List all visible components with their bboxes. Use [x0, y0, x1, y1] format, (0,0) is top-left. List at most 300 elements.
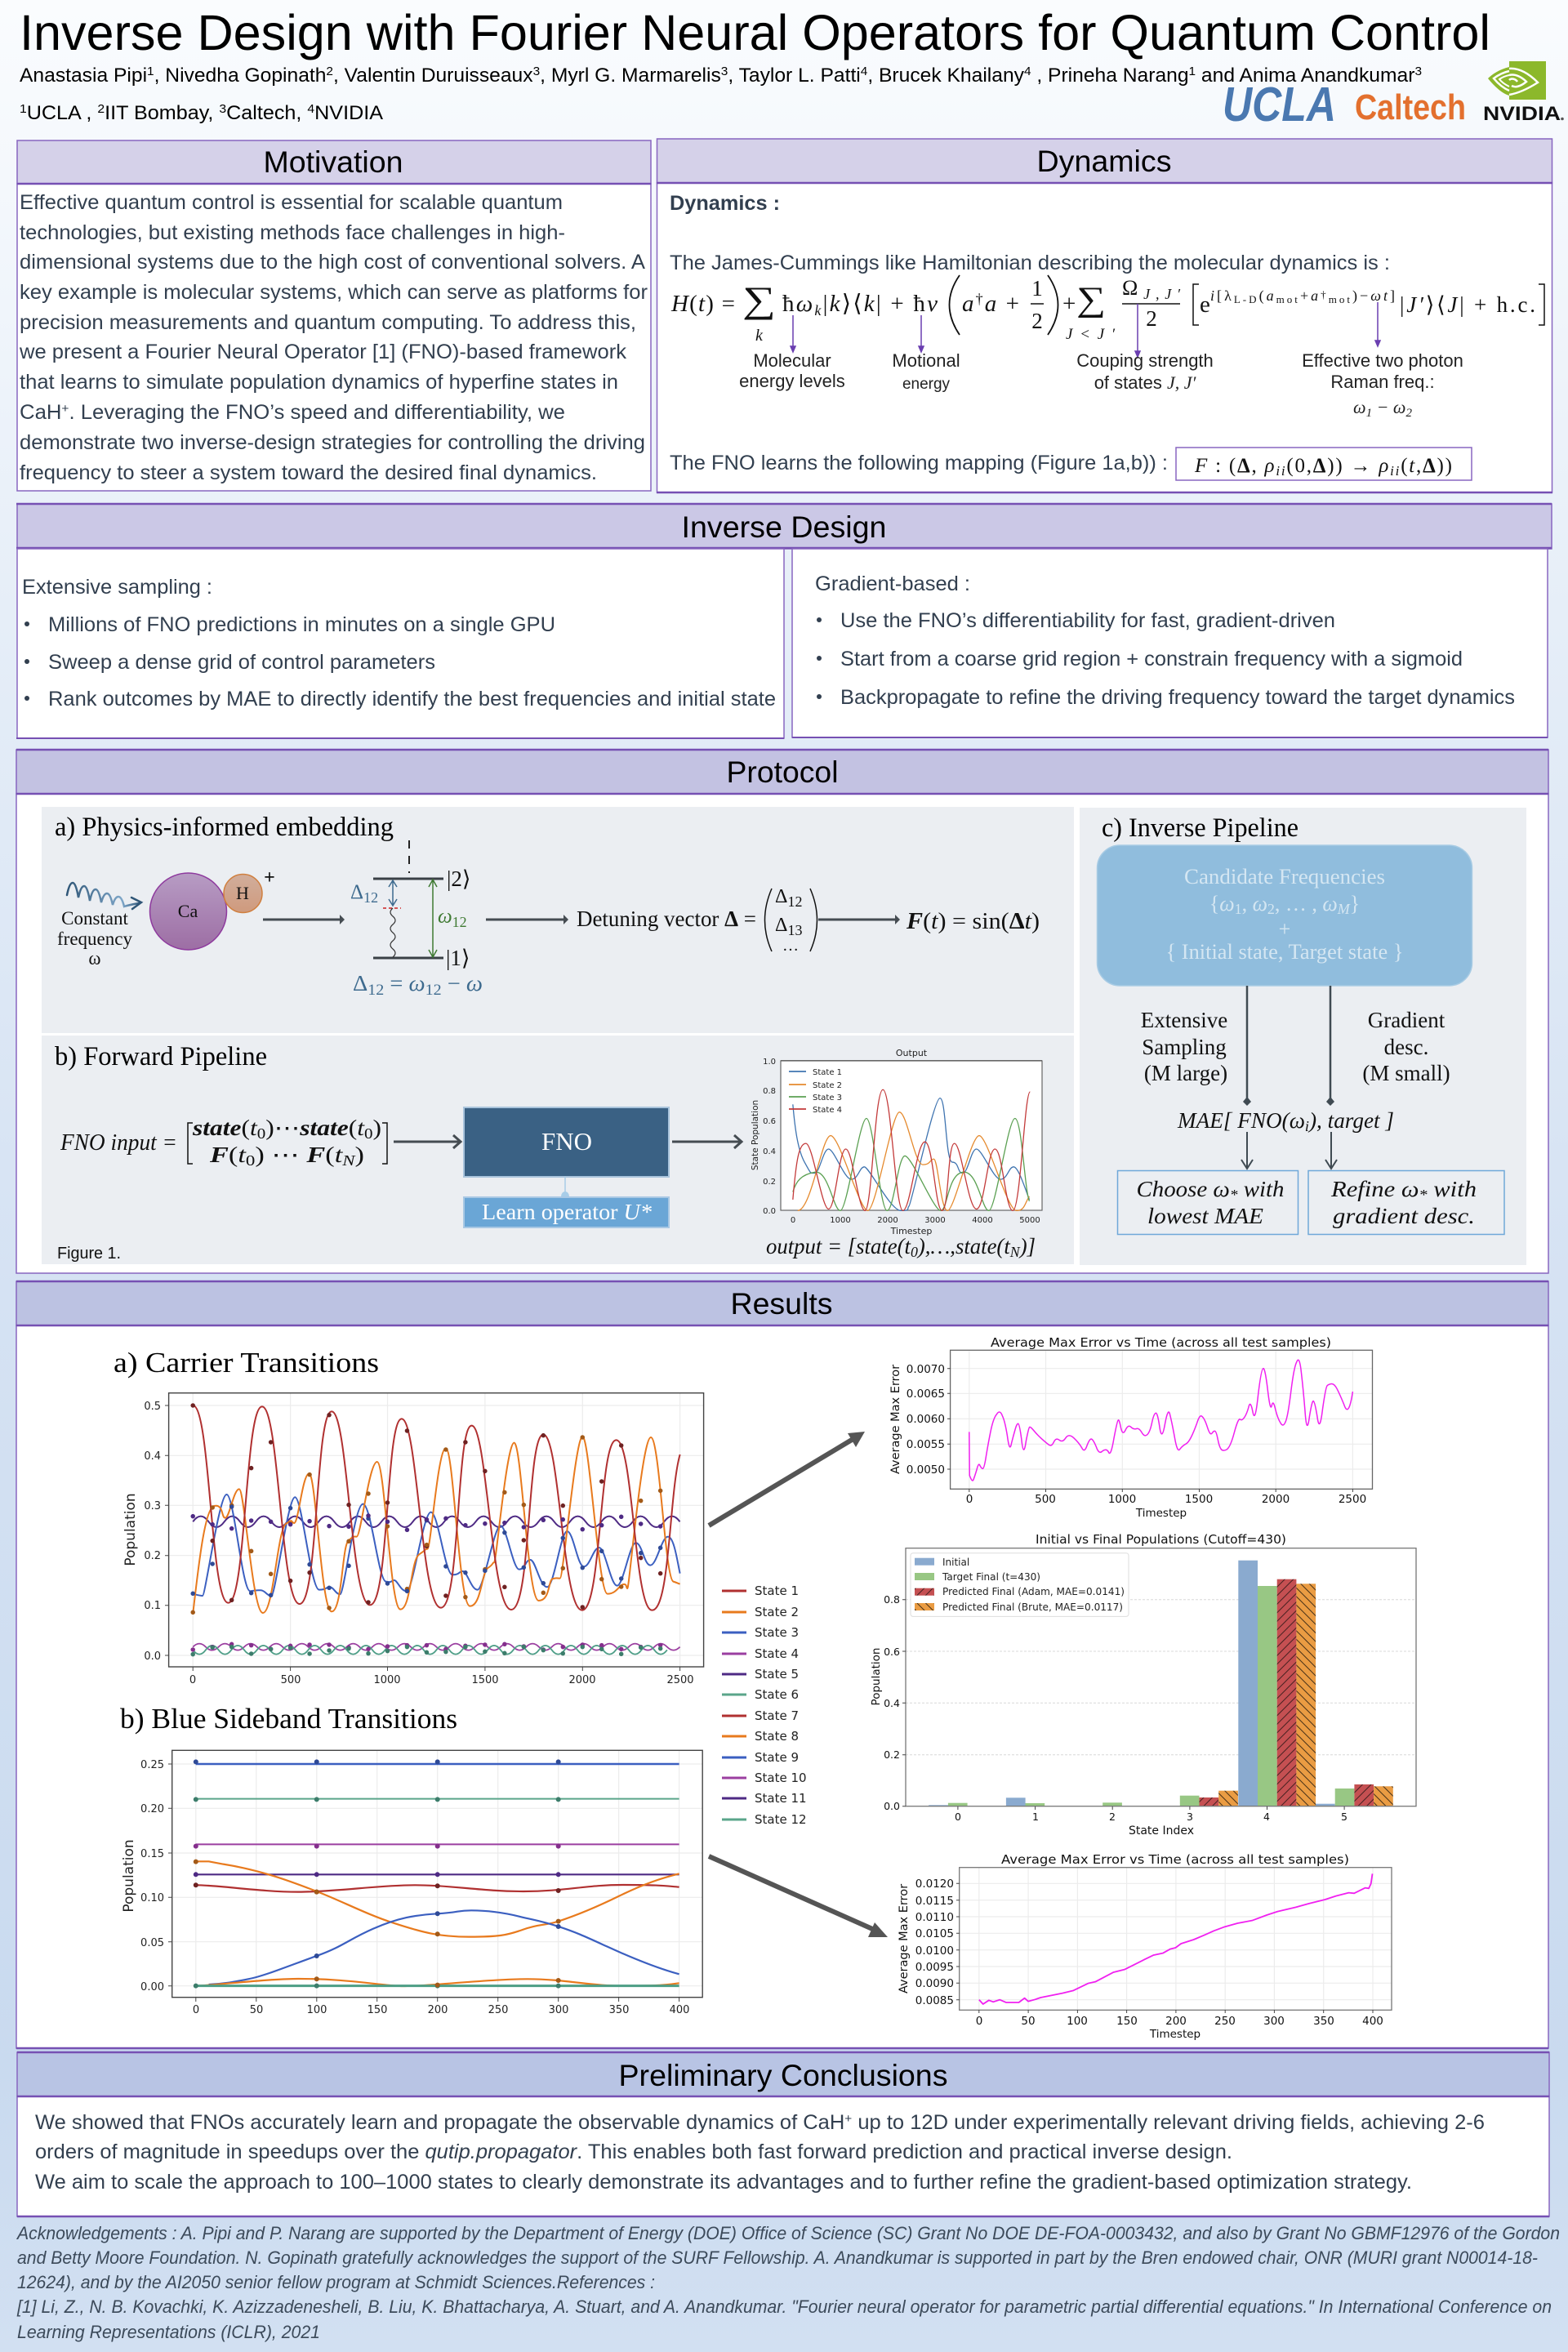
chart: output state population: 1.0: [763, 1058, 776, 1067]
chart: output state population: State 2: [813, 1081, 842, 1090]
chart: average max error carrier: 2000: [1262, 1493, 1290, 1506]
acknowledgements and references: and Betty Moore Foundation. N. Gopinath gratefully acknowledges the support of the SURF Fellowship. A. Anandkumar is supported in part by the Bren endowed chair, ONR (MURI grant N00014-18-: [17, 2247, 1538, 2268]
chart: average max error carrier: 0.0070: [906, 1363, 945, 1376]
chart: carrier transitions: 1500: [471, 1674, 499, 1686]
box: gradient-based: Start from a coarse grid region + constrain frequency with a sigmoid: [840, 648, 1463, 670]
chart: average max error carrier: 1000: [1108, 1493, 1136, 1506]
label: extensive sampling: Extensive: [1141, 1008, 1227, 1032]
chart: output state population: 0.2: [763, 1178, 776, 1187]
chart: blue sideband transitions: 150: [368, 2004, 387, 2016]
box: choose omega with lowest MAE: lowest MAE: [1147, 1204, 1264, 1228]
chart: initial vs final populations: 2: [1109, 1811, 1116, 1823]
detuning vector: Δ: [775, 886, 787, 907]
legend: Initial: [942, 1557, 969, 1568]
chart: blue sideband transitions: 50: [250, 2004, 263, 2016]
box: extensive sampling: [16, 549, 784, 738]
title: Inverse Design with Fourier Neural Operators for Quantum Control: [20, 5, 1490, 60]
chart: carrier transitions: [122, 1393, 704, 1686]
dynamics subheading: Dynamics :: [670, 192, 780, 215]
mapping equation box: [1176, 448, 1472, 480]
affiliations: 2: [97, 102, 105, 116]
chart: blue sideband transitions: 200: [428, 2004, 448, 2016]
chart: average max error sideband: 300: [1263, 2015, 1285, 2028]
legend: Predicted Final (Adam, MAE=0.0141): [942, 1586, 1125, 1597]
chart: output state population: Timestep: [890, 1226, 932, 1236]
equation: hamiltonian: ħω: [782, 291, 813, 317]
output formula: output = [state(t: [766, 1234, 912, 1258]
learn operator block: [464, 1197, 669, 1227]
energy level diagram: −: [442, 971, 466, 996]
box: gradient-based: Backpropagate to refine the driving frequency toward the target dynamics: [840, 686, 1515, 709]
chart: carrier transitions: 0: [189, 1674, 196, 1686]
chart: carrier transitions: 0.2: [144, 1550, 161, 1562]
candidate frequencies box: [1098, 845, 1472, 986]
heading: protocol: Protocol: [727, 755, 838, 789]
equation: hamiltonian: ∑: [1076, 281, 1106, 318]
chart: carrier transitions: 500: [281, 1674, 301, 1686]
output formula: )]: [1018, 1234, 1036, 1258]
affiliations: IIT Bombay,: [105, 102, 219, 124]
equation: hamiltonian: 2: [1146, 306, 1157, 331]
box: gradient-based: [792, 549, 1548, 737]
acknowledgements and references: Learning Representations (ICLR), 2021: [17, 2322, 320, 2342]
chart: blue sideband transitions: 100: [307, 2004, 327, 2016]
chart: average max error sideband: 350: [1313, 2015, 1334, 2028]
chart: initial vs final populations: 0.4: [884, 1697, 900, 1709]
candidate frequencies box: 1: [1235, 901, 1242, 917]
chart: initial vs final populations: 5: [1341, 1811, 1348, 1823]
label: gradient descent: desc.: [1384, 1035, 1428, 1059]
box: refine omega with gradient descent: *: [1419, 1187, 1428, 1203]
text block: motivation body: frequency to steer a system toward the desired final dynamics.: [20, 461, 597, 484]
legend: states: State 5: [755, 1667, 799, 1682]
sub-panel b: forward pipeline: [42, 1036, 1074, 1264]
mapping equation box: ii: [1276, 463, 1285, 479]
box: refine omega with gradient descent: [1308, 1171, 1504, 1235]
chart: output state population: 1000: [830, 1216, 851, 1225]
text block: motivation body: technologies, but existing methods face challenges in high-: [20, 221, 565, 244]
authors: , Brucek Khailany: [867, 65, 1024, 87]
equation: hamiltonian: 1: [1031, 276, 1043, 301]
FNO input formula: )⋯: [265, 1116, 300, 1140]
label: constant frequency: Constant: [61, 908, 128, 929]
logo: UCLA: UCLA: [1223, 78, 1336, 131]
affiliations: NVIDIA: [314, 102, 383, 124]
chart: output state population: 0.8: [763, 1087, 776, 1096]
panel: results: [16, 1281, 1548, 2048]
chart: blue sideband transitions: 0.25: [140, 1759, 164, 1771]
equation: hamiltonian: J<J′: [1066, 326, 1116, 343]
text block: motivation body: Effective quantum control is essential for scalable quantum: [20, 191, 563, 214]
box: gradient-based: Gradient-based :: [815, 572, 970, 595]
chart: blue sideband transitions: Population: [121, 1839, 137, 1913]
equation: hamiltonian: Ω: [1122, 276, 1138, 300]
panel: protocol: [16, 750, 1548, 1273]
candidate frequencies box: Candidate Frequencies: [1184, 865, 1385, 889]
detuning vector: 12: [787, 893, 802, 910]
chart: average max error sideband: [898, 1852, 1392, 2041]
text block: conclusions: We aim to scale the approach to 100–1000 states to clearly demonstrate its advantages and to further refine the gradient-based optimization strategy.: [35, 2171, 1412, 2194]
box: choose omega with lowest MAE: Choose ω: [1137, 1177, 1223, 1201]
detuning vector: 13: [787, 922, 802, 938]
FNO input formula: N: [341, 1152, 356, 1169]
connector: [561, 1177, 569, 1201]
chart: blue sideband transitions: 250: [488, 2004, 508, 2016]
chart: average max error carrier: Average Max Error vs Time (across all test samples): [991, 1335, 1331, 1350]
box: extensive sampling: Sweep a dense grid of control parameters: [48, 651, 435, 674]
annotation: molecular energy levels: [739, 350, 845, 391]
text block: motivation body: precision measurements and quantum computing. To address this,: [20, 311, 636, 334]
acknowledgements and references: [1] Li, Z., N. B. Kovachki, K. Azizzadenesheli, B. Liu, K. Bhattacharya, A. Stuart, and A. Anandkumar. "Fourier neural operator for parametric partial differential equations." In International Conference on: [16, 2296, 1552, 2317]
chart: blue sideband transitions: [121, 1750, 702, 2016]
chart: average max error sideband: 0.0100: [915, 1944, 954, 1958]
arrow: [394, 1135, 461, 1148]
legend: states: [722, 1584, 807, 1827]
chart: output state population: 3000: [924, 1216, 946, 1225]
legend: states: State 8: [755, 1729, 799, 1744]
sub-panel c: inverse pipeline: [1080, 808, 1526, 1265]
text block: motivation body: demonstrate two inverse-design strategies for controlling the driving: [20, 431, 645, 454]
text block: motivation body: we present a Fourier Neural Operator [1] (FNO)-based framework: [19, 341, 627, 363]
box: choose omega with lowest MAE: [1117, 1171, 1298, 1235]
output formula: N: [1009, 1244, 1021, 1260]
chart: carrier transitions: Population: [122, 1493, 139, 1566]
chart: initial vs final populations: State Index: [1129, 1824, 1194, 1838]
candidate frequencies box: }: [1350, 892, 1360, 915]
candidate frequencies box: ω: [1253, 892, 1267, 915]
heading: blue sideband transitions: b) Blue Sideband Transitions: [120, 1703, 457, 1735]
energy level diagram: |2⟩: [447, 866, 470, 891]
chart: average max error sideband: Average Max Error vs Time (across all test samples): [1001, 1852, 1349, 1867]
logos: [1223, 61, 1564, 131]
authors: 1: [147, 65, 154, 78]
learn operator block: Learn operator U*: [482, 1200, 653, 1224]
chart: initial vs final populations: [870, 1532, 1416, 1838]
affiliations: 3: [219, 102, 226, 116]
energy level diagram: [350, 840, 483, 999]
annotation: coupling strength: of states J, J′: [1094, 372, 1196, 393]
heading: results: Results: [730, 1287, 833, 1321]
chart: average max error sideband: 400: [1362, 2015, 1383, 2028]
energy level diagram: ω: [466, 971, 483, 996]
chart: initial vs final populations: 4: [1263, 1811, 1270, 1823]
chart: average max error carrier: 0.0055: [906, 1438, 945, 1451]
affiliations: 4: [307, 102, 314, 116]
chart: blue sideband transitions: 0.00: [140, 1981, 164, 1993]
output formula: ),…,state(t: [916, 1234, 1011, 1258]
chart: output state population: State 4: [813, 1106, 842, 1115]
annotation: effective two photon raman frequency: [1302, 350, 1463, 420]
chart: initial vs final populations: 0.8: [884, 1593, 900, 1606]
FNO input formula: FNO input =: [60, 1129, 177, 1156]
bars: [929, 1561, 1393, 1806]
equation: hamiltonian: a: [985, 291, 996, 317]
label: gradient descent: [1362, 1008, 1450, 1085]
text block: conclusions: +: [844, 2112, 853, 2126]
box: refine omega with gradient descent: gradient desc.: [1333, 1204, 1475, 1228]
annotation: effective two photon raman frequency: Effective two photon: [1302, 350, 1463, 371]
chart: average max error sideband: 0.0090: [915, 1977, 954, 1990]
mapping equation box: ii: [1390, 463, 1400, 479]
legend: states: State 2: [755, 1605, 799, 1619]
box: refine omega with gradient descent: Refine ω: [1331, 1177, 1409, 1201]
box: choose omega with lowest MAE: *: [1230, 1187, 1237, 1203]
embedding formula: F(t) = sin(Δt): [906, 909, 1040, 934]
chart: output state population: [751, 1048, 1042, 1236]
equation: hamiltonian: H(t) =: [670, 291, 735, 317]
heading: dynamics: Dynamics: [1037, 145, 1171, 178]
chart: carrier transitions: 0.0: [144, 1650, 161, 1663]
legend: Target Final (t=430): [942, 1571, 1040, 1583]
chart: output state population: 4000: [972, 1216, 993, 1225]
chart: average max error carrier: 2500: [1339, 1493, 1366, 1506]
mapping equation box: (: [1401, 455, 1408, 477]
equation: hamiltonian: |J′⟩⟨J| + h.c.: [1400, 292, 1535, 317]
mapping equation box: (0,: [1286, 455, 1312, 477]
chart: average max error sideband: 0.0105: [915, 1927, 954, 1940]
candidate frequencies box: { Initial state, Target state }: [1166, 940, 1403, 964]
legend: states: State 9: [755, 1750, 799, 1765]
FNO input formula: 0: [257, 1125, 265, 1142]
candidate frequencies box: M: [1337, 901, 1351, 917]
equation: hamiltonian: †: [976, 291, 983, 307]
authors: 1: [1189, 65, 1196, 78]
equation: hamiltonian: e: [1200, 292, 1210, 318]
chart: carrier transitions: 0.1: [144, 1600, 161, 1612]
annotation: coupling strength: Couping strength: [1076, 350, 1214, 371]
sub-heading b: b) Forward Pipeline: [55, 1042, 267, 1071]
box: choose omega with lowest MAE: with: [1237, 1177, 1284, 1201]
legend: [911, 1553, 1129, 1616]
arrows: MAE to outcomes: [1241, 1132, 1337, 1169]
equation: hamiltonian: [670, 275, 1544, 345]
MAE formula: i: [1305, 1118, 1309, 1134]
chart: carrier transitions: 0.5: [144, 1401, 161, 1413]
chart: output state population: Output: [896, 1048, 928, 1058]
FNO input formula: 0: [364, 1125, 373, 1142]
annotation: motional energy: energy: [902, 376, 951, 393]
annotation: molecular energy levels: Molecular: [753, 350, 831, 371]
label: extensive sampling: [1141, 1008, 1227, 1085]
FNO input formula: state (t: [193, 1116, 256, 1140]
chart: average max error sideband: 0.0115: [915, 1895, 954, 1908]
arrows: candidate to MAE: [1243, 986, 1334, 1106]
legend: states: State 3: [755, 1625, 799, 1640]
chart: initial vs final populations: 1: [1032, 1811, 1039, 1823]
chart: average max error sideband: 0.0120: [915, 1878, 954, 1891]
equation: hamiltonian: a: [1267, 287, 1274, 304]
equation: hamiltonian: i[λ: [1210, 287, 1232, 304]
energy level diagram: 12: [363, 889, 378, 906]
panel: preliminary conclusions: [17, 2052, 1549, 2216]
annotation: effective two photon raman frequency: − ω: [1372, 397, 1405, 417]
chart: average max error carrier: Average Max Error: [889, 1365, 902, 1474]
chart: blue sideband transitions: 400: [670, 2004, 689, 2016]
text block: motivation body: that learns to simulate population dynamics of hyperfine states in: [20, 371, 618, 394]
energy level diagram: ω: [409, 971, 425, 996]
chart: average max error carrier: 0: [966, 1493, 973, 1506]
mapping text: The FNO learns the following mapping (Figure 1a,b)) :: [670, 452, 1168, 474]
chart: average max error sideband: 100: [1067, 2015, 1088, 2028]
chart: average max error sideband: 250: [1214, 2015, 1236, 2028]
FNO input formula: ): [355, 1143, 364, 1167]
chart: carrier transitions: 2000: [568, 1674, 596, 1686]
icon: CaH molecule: H: [236, 883, 249, 903]
legend: Predicted Final (Brute, MAE=0.0117): [942, 1601, 1123, 1613]
authors: and Anima Anandkumar: [1196, 65, 1414, 87]
heading: motivation: Motivation: [263, 145, 403, 179]
equation: hamiltonian: +: [1006, 291, 1019, 317]
FNO input formula: state (t: [300, 1116, 363, 1140]
sub-heading c: c) Inverse Pipeline: [1102, 813, 1298, 843]
heading: inverse design: Inverse Design: [681, 510, 887, 544]
label: extensive sampling: Sampling: [1142, 1035, 1227, 1059]
chart: average max error sideband: Average Max Error: [898, 1884, 911, 1993]
sub-panel a: physics-informed embedding: [42, 807, 1074, 1033]
authors: 3: [1414, 65, 1422, 78]
authors: 4: [861, 65, 867, 78]
annotation: effective two photon raman frequency: 2: [1405, 407, 1412, 420]
chart: blue sideband transitions: 0.20: [140, 1803, 164, 1815]
text block: motivation body: CaH: [20, 401, 60, 424]
FNO input formula: F(t: [306, 1143, 341, 1167]
chart: output state population: State 1: [813, 1068, 842, 1077]
equation: hamiltonian: |: [823, 291, 827, 317]
energy level diagram: 12: [452, 914, 467, 930]
chart: output state population: 0: [791, 1216, 795, 1225]
text block: motivation body: . Leveraging the FNO’s speed and differentiability, we: [69, 401, 565, 424]
chart: output state population: 0.4: [763, 1147, 776, 1156]
icon: CaH molecule: Ca: [178, 901, 198, 921]
legend: states: State 12: [755, 1812, 807, 1827]
authors: 2: [326, 65, 333, 78]
chart: average max error sideband: 0: [976, 2015, 982, 2028]
authors: Anastasia Pipi: [20, 65, 144, 87]
text block: conclusions: [35, 2111, 1485, 2194]
panel: inverse design: [16, 504, 1552, 738]
text block: motivation body: +: [61, 402, 69, 416]
chart: blue sideband transitions: 0.10: [140, 1892, 164, 1904]
annotation: molecular energy levels: energy levels: [739, 371, 845, 391]
affiliations: 1: [20, 102, 27, 116]
detuning vector: Detuning vector Δ =: [577, 906, 756, 931]
authors: 3: [721, 65, 728, 78]
box: gradient-based: Use the FNO’s differentiability for fast, gradient-driven: [840, 609, 1335, 632]
chart: blue sideband transitions: 0.15: [140, 1848, 164, 1860]
chart: output state population: 0.0: [763, 1207, 776, 1216]
chart: average max error sideband: 0.0085: [915, 1994, 954, 2007]
box: extensive sampling: Millions of FNO predictions in minutes on a single GPU: [48, 613, 555, 636]
label: extensive sampling: (M large): [1144, 1061, 1227, 1085]
equation: hamiltonian: mot: [1276, 293, 1298, 305]
equation: hamiltonian: +: [1300, 287, 1308, 304]
authors: , Valentin Duruisseaux: [333, 65, 533, 87]
energy level diagram: =: [384, 971, 409, 996]
authors: 4: [1024, 65, 1031, 78]
chart: initial vs final populations: 3: [1187, 1811, 1193, 1823]
chart: average max error sideband: 150: [1116, 2015, 1138, 2028]
text block: conclusions: We showed that FNOs accurately learn and propagate the observable dynamics of CaH: [35, 2111, 828, 2134]
MAE formula: MAE[ FNO(ω: [1178, 1108, 1304, 1133]
chart: carrier transitions: 1000: [373, 1674, 401, 1686]
chart: average max error sideband: 50: [1021, 2015, 1036, 2028]
legend: states: State 11: [755, 1791, 807, 1806]
text block: conclusions: orders of magnitude in speedups over the qutip.propagator. This enables both fast forward prediction and practical inverse design.: [35, 2140, 1232, 2163]
FNO input formula: ) ⋯: [255, 1143, 306, 1167]
annotation: motional energy: [892, 350, 960, 393]
FNO input formula: ): [373, 1116, 381, 1140]
chart: initial vs final populations: 0.0: [884, 1800, 900, 1812]
text block: conclusions: up to 12D under experimentally relevant driving fields, achieving 2-6: [852, 2111, 1485, 2134]
FNO input formula: [60, 1116, 387, 1169]
legend: states: State 1: [755, 1584, 799, 1598]
candidate frequencies box: 2: [1267, 901, 1275, 917]
FNO input formula: 0: [246, 1152, 255, 1169]
equation: hamiltonian: ωt]: [1370, 287, 1395, 304]
chart: average max error carrier: Timestep: [1135, 1507, 1187, 1520]
mapping equation box: Δ)) → ρ: [1313, 455, 1388, 477]
equation: hamiltonian: k: [755, 327, 764, 345]
FNO input formula: F(t: [210, 1143, 244, 1167]
box: extensive sampling: Rank outcomes by MAE to directly identify the best frequencies and initial state: [48, 688, 776, 710]
equation: hamiltonian: a: [1311, 287, 1318, 304]
acknowledgements and references: 12624), and by the AI2050 senior fellow program at Schmidt Sciences.References :: [17, 2272, 655, 2292]
affiliations: UCLA ,: [27, 102, 97, 124]
chart: average max error sideband: 200: [1165, 2015, 1187, 2028]
mapping equation box: t,Δ)): [1409, 455, 1452, 477]
candidate frequencies box: , … ,: [1275, 892, 1322, 915]
legend: states: State 10: [755, 1771, 807, 1785]
label: constant frequency: frequency: [57, 929, 132, 949]
energy level diagram: Δ: [350, 881, 363, 903]
annotation: effective two photon raman frequency: ω: [1353, 397, 1366, 417]
FNO block: FNO: [541, 1127, 592, 1156]
arrow: [672, 1135, 742, 1148]
box: extensive sampling: Extensive sampling :: [22, 576, 212, 599]
chart: output state population: State 3: [813, 1094, 842, 1102]
panel: dynamics: [657, 139, 1552, 492]
candidate frequencies box: +: [1279, 917, 1290, 941]
equation: hamiltonian: L-D: [1234, 293, 1257, 305]
affiliations: Caltech,: [226, 102, 307, 124]
label: constant frequency: ω: [88, 948, 101, 969]
arrow: sideband to error chart: [709, 1856, 888, 1937]
text block: motivation body: [19, 191, 648, 484]
candidate frequencies box: ,: [1242, 892, 1253, 915]
equation: hamiltonian: ∑: [742, 279, 776, 320]
output formula: 0: [911, 1244, 918, 1260]
icon: CaH molecule: +: [264, 867, 275, 889]
equation: hamiltonian: a: [962, 291, 973, 317]
arrow: carrier to error chart: [709, 1432, 865, 1526]
arrow: [818, 915, 900, 924]
equation: hamiltonian: k⟩⟨k| + ħν: [830, 291, 938, 317]
energy level diagram: ω: [438, 906, 452, 928]
equation: hamiltonian: k: [814, 302, 822, 318]
annotation: effective two photon raman frequency: Raman freq.:: [1330, 372, 1435, 392]
chart: initial vs final populations: 0.2: [884, 1748, 900, 1761]
box: refine omega with gradient descent: with: [1428, 1177, 1477, 1201]
panel: motivation: [17, 140, 651, 491]
equation: hamiltonian: (: [1259, 287, 1264, 305]
chart: carrier transitions: 2500: [666, 1674, 694, 1686]
label: gradient descent: Gradient: [1368, 1008, 1446, 1032]
detuning vector: …: [782, 937, 799, 955]
chart: average max error carrier: 0.0060: [906, 1413, 945, 1426]
candidate frequencies box: ω: [1322, 892, 1338, 915]
energy level diagram: |1⟩: [446, 946, 470, 970]
legend: states: State 4: [755, 1646, 799, 1661]
